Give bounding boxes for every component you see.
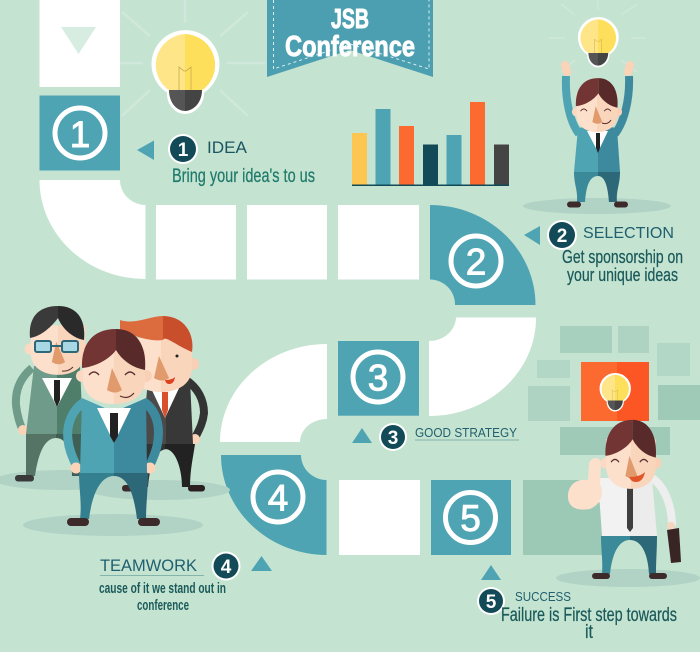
step 3 tile: 3 <box>368 358 388 398</box>
description <box>562 247 683 285</box>
badge 2 <box>547 220 577 250</box>
step 2 tile: 2 <box>466 242 486 282</box>
step 2 label: selection <box>524 220 683 285</box>
badge 1: 1 <box>178 140 189 161</box>
ground shadow <box>556 569 700 587</box>
white square tile bottom <box>339 480 420 555</box>
arrow <box>524 226 540 245</box>
description: Bring your idea's to us <box>172 166 315 187</box>
white curved tile <box>40 180 146 279</box>
white curved tile right <box>429 318 536 416</box>
description: it <box>585 622 594 643</box>
thumbs up hand <box>568 458 606 510</box>
heading: TEAMWORK <box>100 556 198 575</box>
step 4 label: teamwork <box>99 552 272 614</box>
step 4 tile: 4 <box>268 478 288 518</box>
white square tiles <box>156 205 419 280</box>
icon: main light bulb with rays <box>120 0 265 116</box>
end tile <box>523 480 613 555</box>
background wall tiles <box>528 326 700 455</box>
description: conference <box>137 597 189 614</box>
description <box>501 605 677 643</box>
title banner: JSB <box>331 3 369 34</box>
bar chart <box>352 102 509 186</box>
arrow <box>481 565 501 580</box>
step 4 tile <box>221 455 326 555</box>
arrow <box>137 140 154 160</box>
game board path <box>40 0 613 555</box>
description: cause of it we stand out in <box>99 580 226 597</box>
heading: GOOD STRATEGY <box>415 425 517 440</box>
badge 4 <box>212 552 240 580</box>
badge 4: 4 <box>221 557 232 578</box>
person: man raising light bulb <box>523 0 671 214</box>
step 1 tile <box>40 96 120 170</box>
step 2 tile <box>430 205 536 305</box>
icon: orange tile with bulb <box>581 362 649 421</box>
icon: small bulb with rays <box>549 0 646 72</box>
heading: SUCCESS <box>515 590 571 604</box>
person: glasses man <box>15 306 91 482</box>
person: man with thumbs up <box>556 420 700 587</box>
team of three people <box>0 306 230 536</box>
ground shadow <box>523 198 671 214</box>
badge 3: 3 <box>388 428 398 449</box>
description <box>99 580 226 614</box>
badge 3 <box>379 423 407 451</box>
step 1 tile: 1 <box>70 114 90 155</box>
arrow <box>251 556 272 571</box>
step 3 label: good strategy <box>352 423 519 451</box>
step 5 tile: 5 <box>460 498 481 539</box>
badge 2: 2 <box>557 226 567 247</box>
title banner <box>267 0 433 77</box>
heading: SELECTION <box>583 225 674 242</box>
start tile with arrow <box>40 0 120 87</box>
step 5 label: success <box>477 565 677 643</box>
step 1 label: idea <box>137 134 315 187</box>
arrow <box>352 428 372 443</box>
step 3 tile <box>338 341 419 416</box>
badge 5: 5 <box>486 592 497 613</box>
step 5 tile <box>431 480 511 555</box>
person: teal suit man <box>67 329 160 526</box>
white curved tile left <box>220 344 327 442</box>
briefcase <box>667 528 681 563</box>
heading: IDEA <box>207 138 248 157</box>
badge 1 <box>168 134 198 164</box>
title banner: Conference <box>285 31 415 63</box>
person: red-haired man <box>120 316 205 492</box>
ground shadows <box>0 470 230 536</box>
badge 5 <box>477 587 505 615</box>
